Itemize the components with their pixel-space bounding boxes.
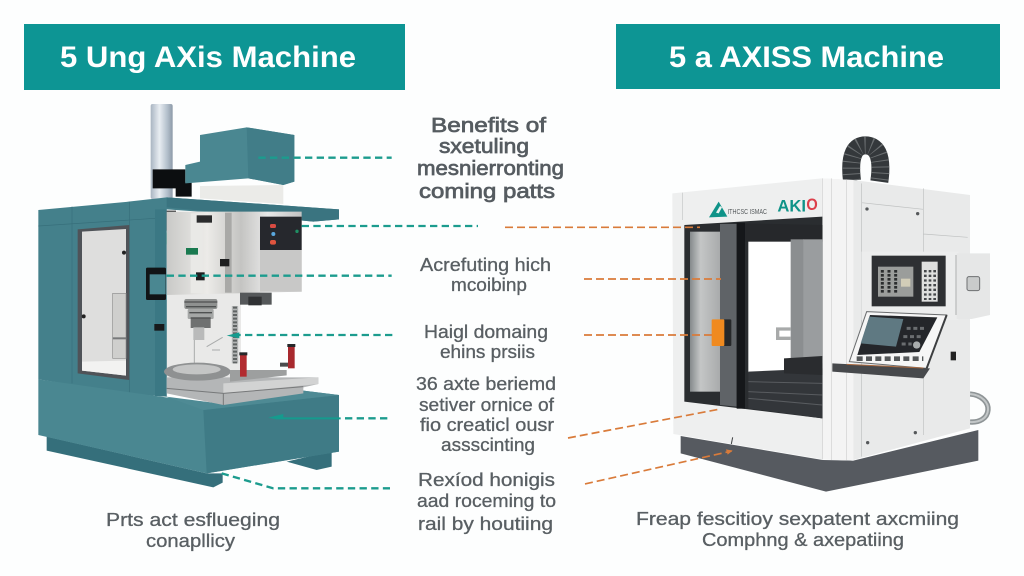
text block: rexiod: rail by houtiing xyxy=(418,514,553,534)
text block: 36 axte: fio creaticl ousr xyxy=(420,415,554,435)
center heading text: mesnierronting xyxy=(417,158,564,180)
lower operator console xyxy=(832,312,947,378)
left caption: conapllicy xyxy=(146,531,235,551)
text block: haigl domaing xyxy=(424,322,548,362)
spindle head xyxy=(167,212,302,305)
center heading text: coming patts xyxy=(419,181,555,203)
right caption: Freap fescitioy sexpatent axcmiing xyxy=(636,509,959,529)
text block: 36 axte: assscinting xyxy=(441,435,535,455)
base xyxy=(38,379,339,487)
text block: rexiod: aad roceming to xyxy=(417,491,556,511)
orange latch xyxy=(712,319,731,346)
door window xyxy=(78,225,129,380)
machine opening xyxy=(684,217,822,418)
text block: haigl domaing: Haigl domaing xyxy=(424,322,548,342)
right heading banner: 5 a AXISS Machine xyxy=(669,41,944,74)
side latch xyxy=(146,211,176,331)
logo: AKI xyxy=(777,197,806,216)
left caption: Prts act esflueging xyxy=(106,510,280,530)
right caption xyxy=(636,509,959,550)
white housing under motor xyxy=(200,185,283,204)
center heading text: sxetuling xyxy=(439,136,529,158)
left heading banner xyxy=(24,24,405,90)
right caption: Comphng & axepatiing xyxy=(702,530,904,550)
center heading text: Benefits of xyxy=(431,115,547,137)
chain guide xyxy=(225,306,244,363)
logo xyxy=(709,195,818,217)
logo: ITHCSC ISMAC xyxy=(728,207,768,216)
center heading text xyxy=(417,115,564,203)
spindle rings and tool xyxy=(184,299,223,363)
text block: 36 axte: 36 axte beriemd xyxy=(416,374,556,394)
front frame xyxy=(672,178,853,461)
logo: O xyxy=(806,195,818,214)
teal arrow xyxy=(227,332,341,419)
top motor box xyxy=(185,127,294,185)
left machine illustration xyxy=(38,104,478,488)
text block: 36 axte: setiver ornice of xyxy=(419,395,555,415)
red clamps xyxy=(239,344,295,377)
machine interior xyxy=(166,290,241,380)
text block: rexiod: Rexíod honigis xyxy=(418,470,555,490)
machine base xyxy=(681,430,978,492)
text block: high machining xyxy=(420,255,551,295)
exhaust column xyxy=(151,104,173,199)
control panel xyxy=(260,217,302,250)
left caption xyxy=(106,510,280,551)
right heading banner xyxy=(616,24,1000,89)
text block: high machining: mcoibinp xyxy=(451,275,527,295)
rear hose xyxy=(970,394,988,422)
right machine illustration xyxy=(505,145,990,492)
cable carrier xyxy=(851,145,880,182)
text block: haigl domaing: ehins prsiis xyxy=(440,342,535,362)
orange arrow head xyxy=(726,449,733,455)
text block: 36 axte xyxy=(416,374,556,455)
text block: rexiod xyxy=(417,470,556,534)
text block: high machining: Acrefuting hich xyxy=(420,255,551,275)
orange leader lines xyxy=(505,227,732,484)
side electrical box xyxy=(956,253,990,319)
machine body xyxy=(38,197,339,397)
upper control screen xyxy=(862,252,958,320)
black bracket xyxy=(153,169,192,197)
side panel xyxy=(853,180,970,460)
left heading banner: 5 Ung AXis Machine xyxy=(60,41,356,74)
teal leader lines xyxy=(167,158,478,488)
worktable xyxy=(164,363,318,405)
